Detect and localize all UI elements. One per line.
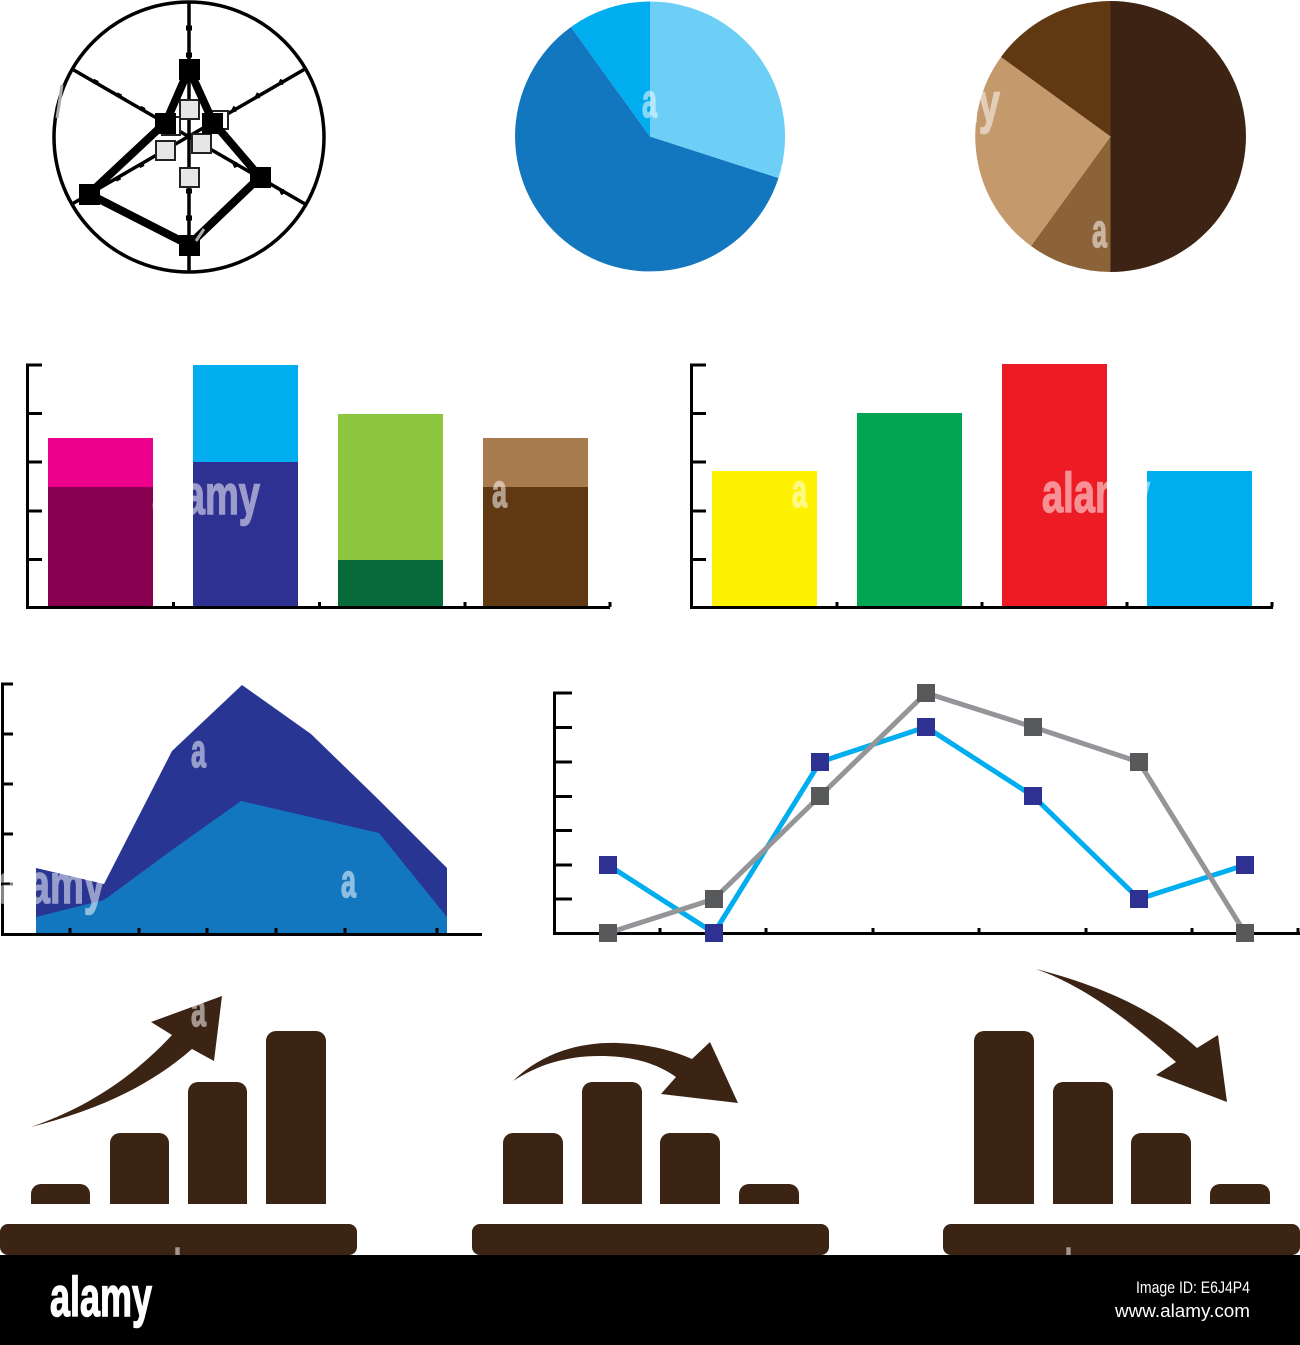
icon: down arrow: [1036, 969, 1227, 1102]
watermark word: stacked bar: alamy: [152, 463, 260, 526]
bar: green: [857, 413, 962, 607]
markers: blue series: [599, 718, 1254, 942]
area series: dark blue: [36, 685, 447, 934]
footer logo: alamy: [50, 1265, 152, 1328]
bar: yellow: [712, 471, 817, 607]
radar dark series markers: [79, 59, 271, 256]
icon: curved arrow: [513, 1042, 738, 1103]
radar dark series polygon: [89, 69, 260, 245]
peak bars: [503, 1082, 799, 1204]
panel: radar chart: [54, 2, 324, 272]
footer image id: Image ID: E6J4P4: [1136, 1278, 1250, 1297]
main blue slice: [515, 27, 778, 271]
watermark word: brown pie: alamy: [892, 71, 1000, 134]
simple bar chart axes: [692, 365, 1273, 608]
panel: peak bars icon: [472, 1042, 829, 1255]
stacked chart axes: [28, 365, 610, 608]
watermark letter: arrow: a: [191, 983, 206, 1036]
rising base: [0, 1224, 357, 1255]
watermark letter: area top: a: [191, 724, 206, 777]
falling bars: [974, 1031, 1270, 1204]
falling base: [943, 1224, 1300, 1255]
icon: up arrow: [31, 996, 222, 1127]
line series: gray: [608, 693, 1245, 933]
panel: area chart: [2, 684, 482, 934]
mid brown slice: [1031, 136, 1110, 272]
footer background: [0, 1255, 1300, 1345]
watermark overlay: [0, 71, 1150, 1255]
line series: cyan: [608, 727, 1245, 933]
line chart axes: [554, 693, 1300, 934]
dark half slice: [1110, 1, 1246, 272]
stacked bar: magenta: [48, 438, 153, 607]
watermark letter: brown pie: a: [1092, 204, 1107, 257]
light blue slice: [650, 1, 785, 178]
watermark marks on bases: [176, 1248, 1070, 1255]
stacked bar: green: [338, 414, 443, 607]
watermark letter: blue pie: a: [642, 74, 657, 127]
panel: falling bars icon: [943, 969, 1300, 1255]
radar outer circle: [54, 2, 324, 272]
chestnut slice: [1001, 1, 1110, 136]
radar light series markers: [156, 100, 228, 187]
footer url: www.alamy.com: [1114, 1301, 1250, 1321]
panel: brown pie chart: [975, 1, 1246, 272]
radar watermark traces: [57, 85, 204, 241]
bar: red: [1002, 364, 1107, 607]
rising bars: [31, 1031, 326, 1204]
panel: simple bar chart: [692, 364, 1273, 608]
watermark letter: yellow bar: a: [792, 464, 807, 517]
radar spoke ticks: [94, 28, 284, 218]
stacked bar: blue: [193, 365, 298, 607]
area series: mid blue: [36, 801, 447, 934]
footer bar: [0, 1255, 1300, 1345]
cyan slice: [571, 1, 650, 136]
watermark word: area chart: alamy: [0, 852, 105, 915]
panel: rising bars icon: [0, 996, 357, 1255]
radar spokes: [72, 2, 305, 272]
area chart axes: [2, 684, 482, 934]
tan slice: [975, 57, 1110, 246]
markers: gray series: [599, 684, 1254, 942]
panel: stacked bar chart: [28, 365, 610, 608]
panel: blue pie chart: [515, 1, 785, 271]
watermark letter: brown stacked bar: a: [492, 464, 507, 517]
peak base: [472, 1224, 829, 1255]
stacked bar: brown: [483, 438, 588, 607]
panel: line chart: [554, 684, 1300, 942]
watermark word: simple bar: alamy: [1042, 461, 1150, 524]
watermark letter: area bottom: a: [341, 854, 356, 907]
bar: cyan: [1147, 471, 1252, 607]
